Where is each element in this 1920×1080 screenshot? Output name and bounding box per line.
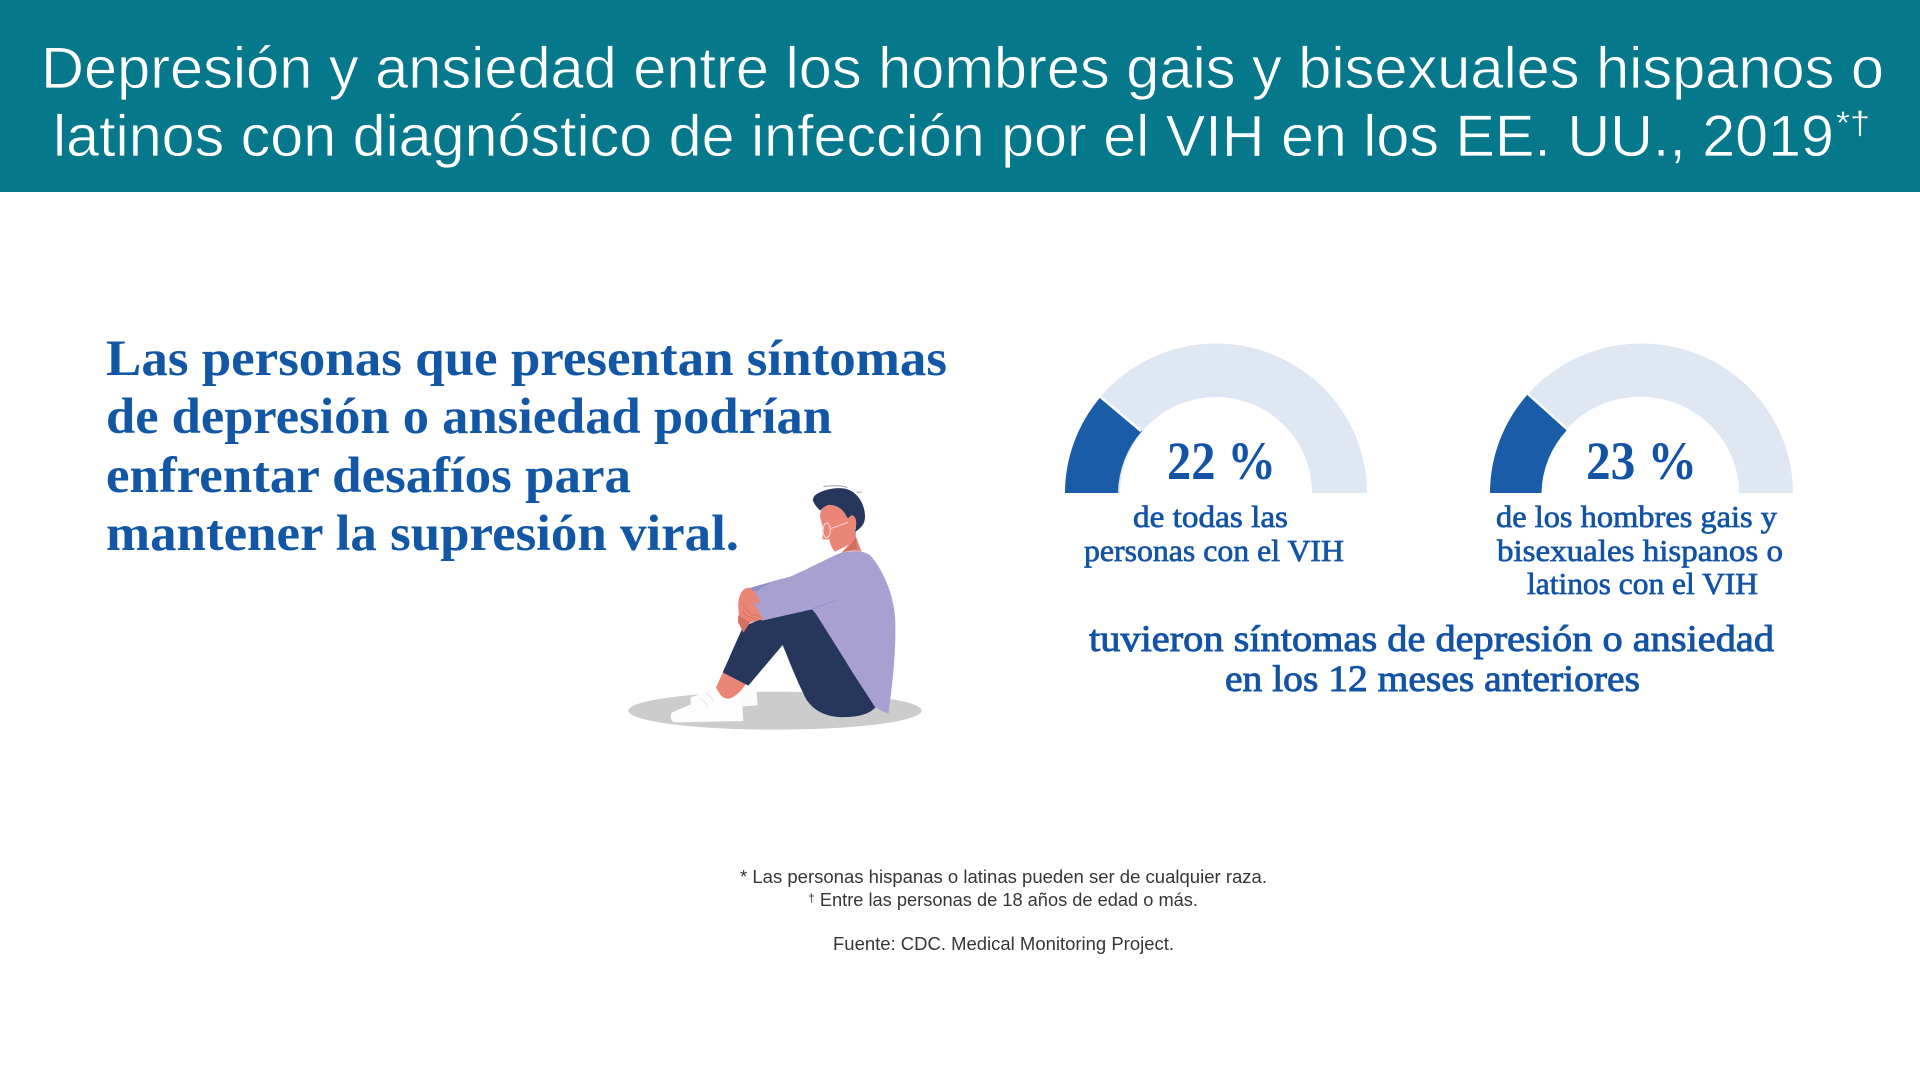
- conclusion text: [1089, 619, 1775, 700]
- floor shadow: [628, 692, 922, 730]
- foot: [716, 670, 747, 699]
- finger lines: [743, 607, 760, 619]
- title: Depresión y ansiedad entre los hombres gais y bisexuales hispanos o: [41, 36, 1884, 101]
- back shoe: [700, 685, 758, 708]
- gauge: 22 percent: [1065, 344, 1367, 493]
- footnotes and source: Entre las personas de 18 años de edad o más.: [815, 890, 1198, 910]
- hand: [738, 588, 762, 633]
- footnotes and source: Fuente: CDC. Medical Monitoring Project.: [833, 934, 1174, 954]
- heading text block: enfrentar desafíos para: [106, 448, 631, 504]
- gauge label: all people: de todas las: [1133, 499, 1288, 534]
- footnotes and source: * Las personas hispanas o latinas pueden ser de cualquier raza.: [740, 867, 1267, 887]
- heading text block: [106, 331, 947, 562]
- gauge label: Hispanic or Latino gay and bisexual men: [1496, 499, 1783, 601]
- gauge label: all people: personas con el VIH: [1084, 533, 1344, 568]
- conclusion text: en los 12 meses anteriores: [1225, 659, 1640, 700]
- title: latinos con diagnóstico de infección por el VIH en los EE. UU., 2019: [53, 104, 1834, 169]
- glasses: [823, 522, 848, 538]
- hair: [813, 488, 865, 532]
- conclusion text: tuvieron síntomas de depresión o ansiedad: [1089, 619, 1775, 660]
- legs: [723, 608, 875, 717]
- hair wisps: [823, 486, 862, 492]
- header banner: [0, 0, 1920, 192]
- footnotes and source: [740, 867, 1267, 954]
- title: *†: [1836, 105, 1870, 141]
- gauge label: Hispanic or Latino gay and bisexual men: bisexuales hispanos o: [1497, 533, 1783, 568]
- illustration: seated person: [628, 486, 922, 730]
- gauge: 23 percent: 23 %: [1586, 431, 1697, 491]
- shoe crease lines: [699, 693, 713, 707]
- front shoe: [671, 689, 743, 722]
- neck: [842, 534, 862, 553]
- heading text block: Las personas que presentan síntomas: [106, 331, 947, 387]
- sleeve shading: [748, 577, 790, 592]
- gauge label: all people: [1084, 499, 1344, 568]
- shirt: [748, 551, 895, 714]
- heading text block: mantener la supresión viral.: [106, 506, 739, 562]
- title: [41, 36, 1884, 169]
- ear: [848, 515, 856, 531]
- footnotes and source: †: [808, 891, 815, 905]
- gauge label: Hispanic or Latino gay and bisexual men: latinos con el VIH: [1527, 566, 1758, 601]
- face: [820, 502, 856, 552]
- gauge: 23 percent: [1490, 344, 1793, 493]
- gauge label: Hispanic or Latino gay and bisexual men: de los hombres gais y: [1496, 499, 1778, 534]
- gauge: 22 percent: 22 %: [1167, 431, 1276, 491]
- heading text block: de depresión o ansiedad podrían: [106, 389, 832, 445]
